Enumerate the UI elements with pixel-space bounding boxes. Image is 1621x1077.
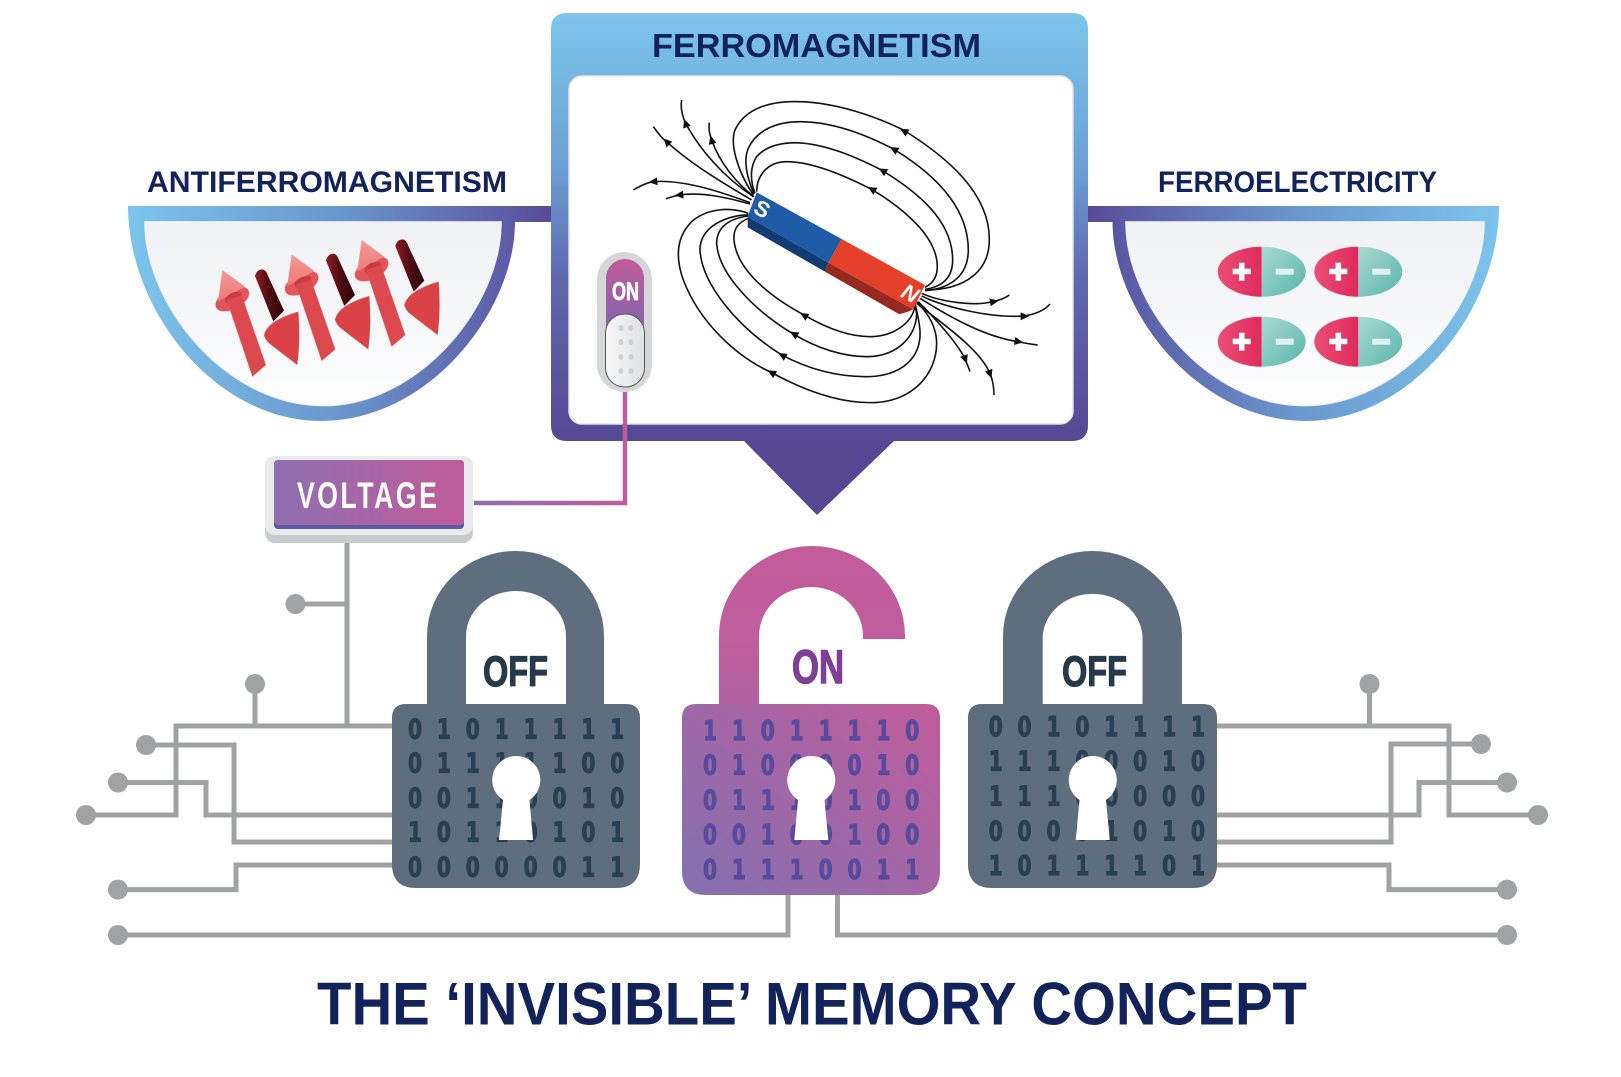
binary digits: 11011110 xyxy=(703,714,919,747)
circuit traces: left xyxy=(76,543,788,945)
voltage button: VOLTAGE xyxy=(297,475,439,516)
heading: antiferromagnetism: ANTIFERROMAGNETISM xyxy=(147,166,507,199)
arrow: voltage wire to switch xyxy=(474,390,625,503)
binary digits xyxy=(703,714,919,886)
binary digits: 01111100 xyxy=(408,746,624,780)
binary digits: 10110101 xyxy=(408,815,624,849)
voltage button xyxy=(265,456,473,543)
icon: four electric dipoles xyxy=(1218,247,1402,367)
circuit traces: right xyxy=(838,674,1548,945)
binary digits: 00001010 xyxy=(989,814,1205,848)
keyhole xyxy=(492,756,540,840)
heading: ferromagnetism: FERROMAGNETISM xyxy=(652,28,981,65)
binary digits: 11100010 xyxy=(989,744,1205,778)
keyhole xyxy=(787,756,835,840)
label: OFF: OFF xyxy=(483,648,548,696)
label: ON: ON xyxy=(792,640,844,693)
panel: ferroelectricity bowl xyxy=(1088,166,1499,421)
lock: right OFF xyxy=(968,551,1217,888)
icon: antiparallel red spin arrows xyxy=(211,239,440,377)
lock: middle ON (open) xyxy=(682,546,940,895)
binary digits: 00000011 xyxy=(408,850,624,884)
binary digits: 10111101 xyxy=(989,849,1205,882)
panel: ferromagnetism callout xyxy=(551,13,1088,515)
binary digits: 01110011 xyxy=(703,853,919,886)
panel: antiferromagnetism bowl xyxy=(128,166,551,421)
heading: ferroelectricity: FERROELECTRICITY xyxy=(1158,166,1437,199)
control: ON switch xyxy=(597,252,652,392)
keyhole xyxy=(1069,756,1117,840)
label: OFF: OFF xyxy=(1062,648,1127,696)
binary digits xyxy=(408,712,624,884)
lock: left OFF xyxy=(392,551,640,888)
diagram: bar magnet with field lines xyxy=(633,100,1050,403)
diagram: bar magnet with field lines: N xyxy=(897,279,924,309)
diagram: bar magnet with field lines: S xyxy=(750,195,775,224)
binary digits: 11100000 xyxy=(989,779,1205,813)
binary digits: 01000010 xyxy=(703,748,919,781)
main title: THE ‘INVISIBLE’ MEMORY CONCEPT xyxy=(317,970,1307,1038)
binary digits: 00110010 xyxy=(408,781,624,814)
binary digits: 00100100 xyxy=(703,818,919,851)
binary digits: 01011111 xyxy=(408,712,624,745)
control: ON switch: ON xyxy=(612,278,639,306)
binary digits: 00101111 xyxy=(989,710,1205,743)
binary digits xyxy=(989,710,1205,882)
binary digits: 01110100 xyxy=(703,783,919,816)
